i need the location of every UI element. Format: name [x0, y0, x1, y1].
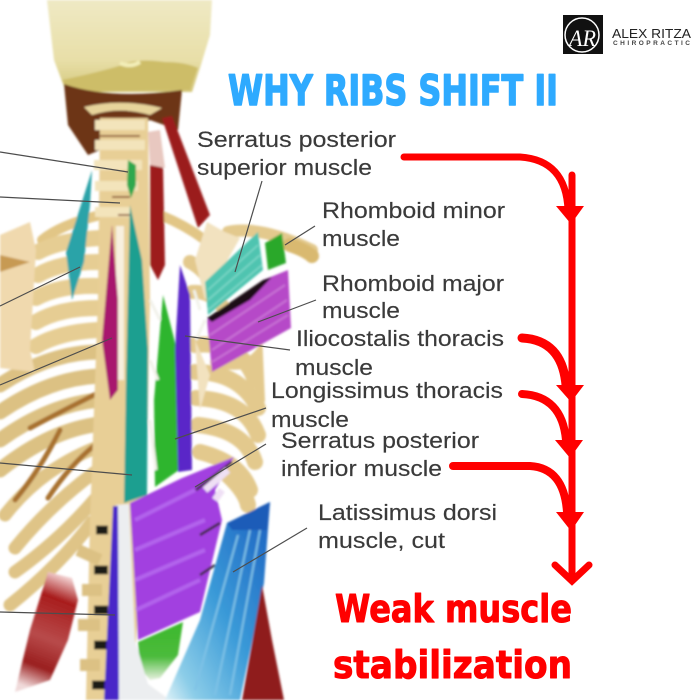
arrow: main vertical [568, 175, 576, 580]
logo [563, 15, 691, 54]
logo mark: AR [567, 26, 596, 51]
spine and vertebrae [78, 103, 162, 700]
red arrows [404, 157, 589, 581]
label: rhomboid major: Rhomboid major [322, 271, 504, 296]
conclusion line 1: Weak muscle [335, 587, 572, 631]
title: WHY RIBS SHIFT II [228, 66, 558, 115]
logo tagline: CHIROPRACTIC [613, 40, 690, 47]
muscle: thoracolumbar fascia and violet strip [104, 504, 170, 700]
leader lines [0, 152, 316, 615]
muscle: rhomboid minor teal [205, 232, 286, 315]
label: serratus posterior superior: superior muscle [197, 155, 372, 180]
labels [197, 127, 505, 553]
label: longissimus thoracis: muscle [271, 407, 349, 432]
conclusion line 2: stabilization [333, 643, 572, 687]
skull [47, 0, 212, 155]
label: serratus posterior superior: Serratus posterior [197, 127, 396, 152]
label: latissimus dorsi: muscle, cut [318, 528, 445, 553]
muscle: dark red lower [15, 572, 284, 700]
arrow: from longissimus [522, 394, 583, 458]
label: rhomboid minor: Rhomboid minor [322, 198, 505, 223]
muscle: violet column [175, 265, 192, 472]
muscle: green cervical [127, 160, 136, 198]
label: iliocostalis thoracis: muscle [295, 355, 373, 380]
label: serratus posterior inferior: Serratus posterior [281, 428, 479, 453]
arrow: final chevron [555, 565, 589, 581]
scapulae [0, 222, 240, 410]
label: longissimus thoracis: Longissimus thoracis [271, 378, 503, 403]
label: iliocostalis thoracis: Iliocostalis thoracis [296, 326, 504, 351]
muscle: rhomboid major purple [207, 270, 291, 372]
muscle: serratus posterior inferior purple [130, 457, 234, 640]
label: serratus posterior inferior: inferior muscle [281, 456, 442, 481]
label: latissimus dorsi: Latissimus dorsi [318, 500, 497, 525]
conclusion text [333, 587, 572, 687]
logo wordmark: ALEX RITZA [612, 26, 691, 41]
muscle: magenta strip [102, 225, 118, 400]
anatomical illustration [0, 0, 312, 700]
arrow: from iliocostalis [522, 338, 584, 402]
muscle: latissimus dorsi blue [165, 502, 270, 700]
rib cage [0, 215, 312, 605]
muscle: teal central column [124, 205, 148, 503]
muscle: teal upper left [66, 170, 92, 300]
muscle: dark red neck straps [148, 116, 210, 280]
arrow: from serratus posterior superior [404, 157, 584, 224]
arrow: from serratus posterior inferior [453, 466, 584, 531]
label: rhomboid major: muscle [322, 298, 400, 323]
muscle: lower green [138, 622, 183, 680]
label: rhomboid minor: muscle [322, 226, 400, 251]
muscle: green column [154, 295, 179, 487]
